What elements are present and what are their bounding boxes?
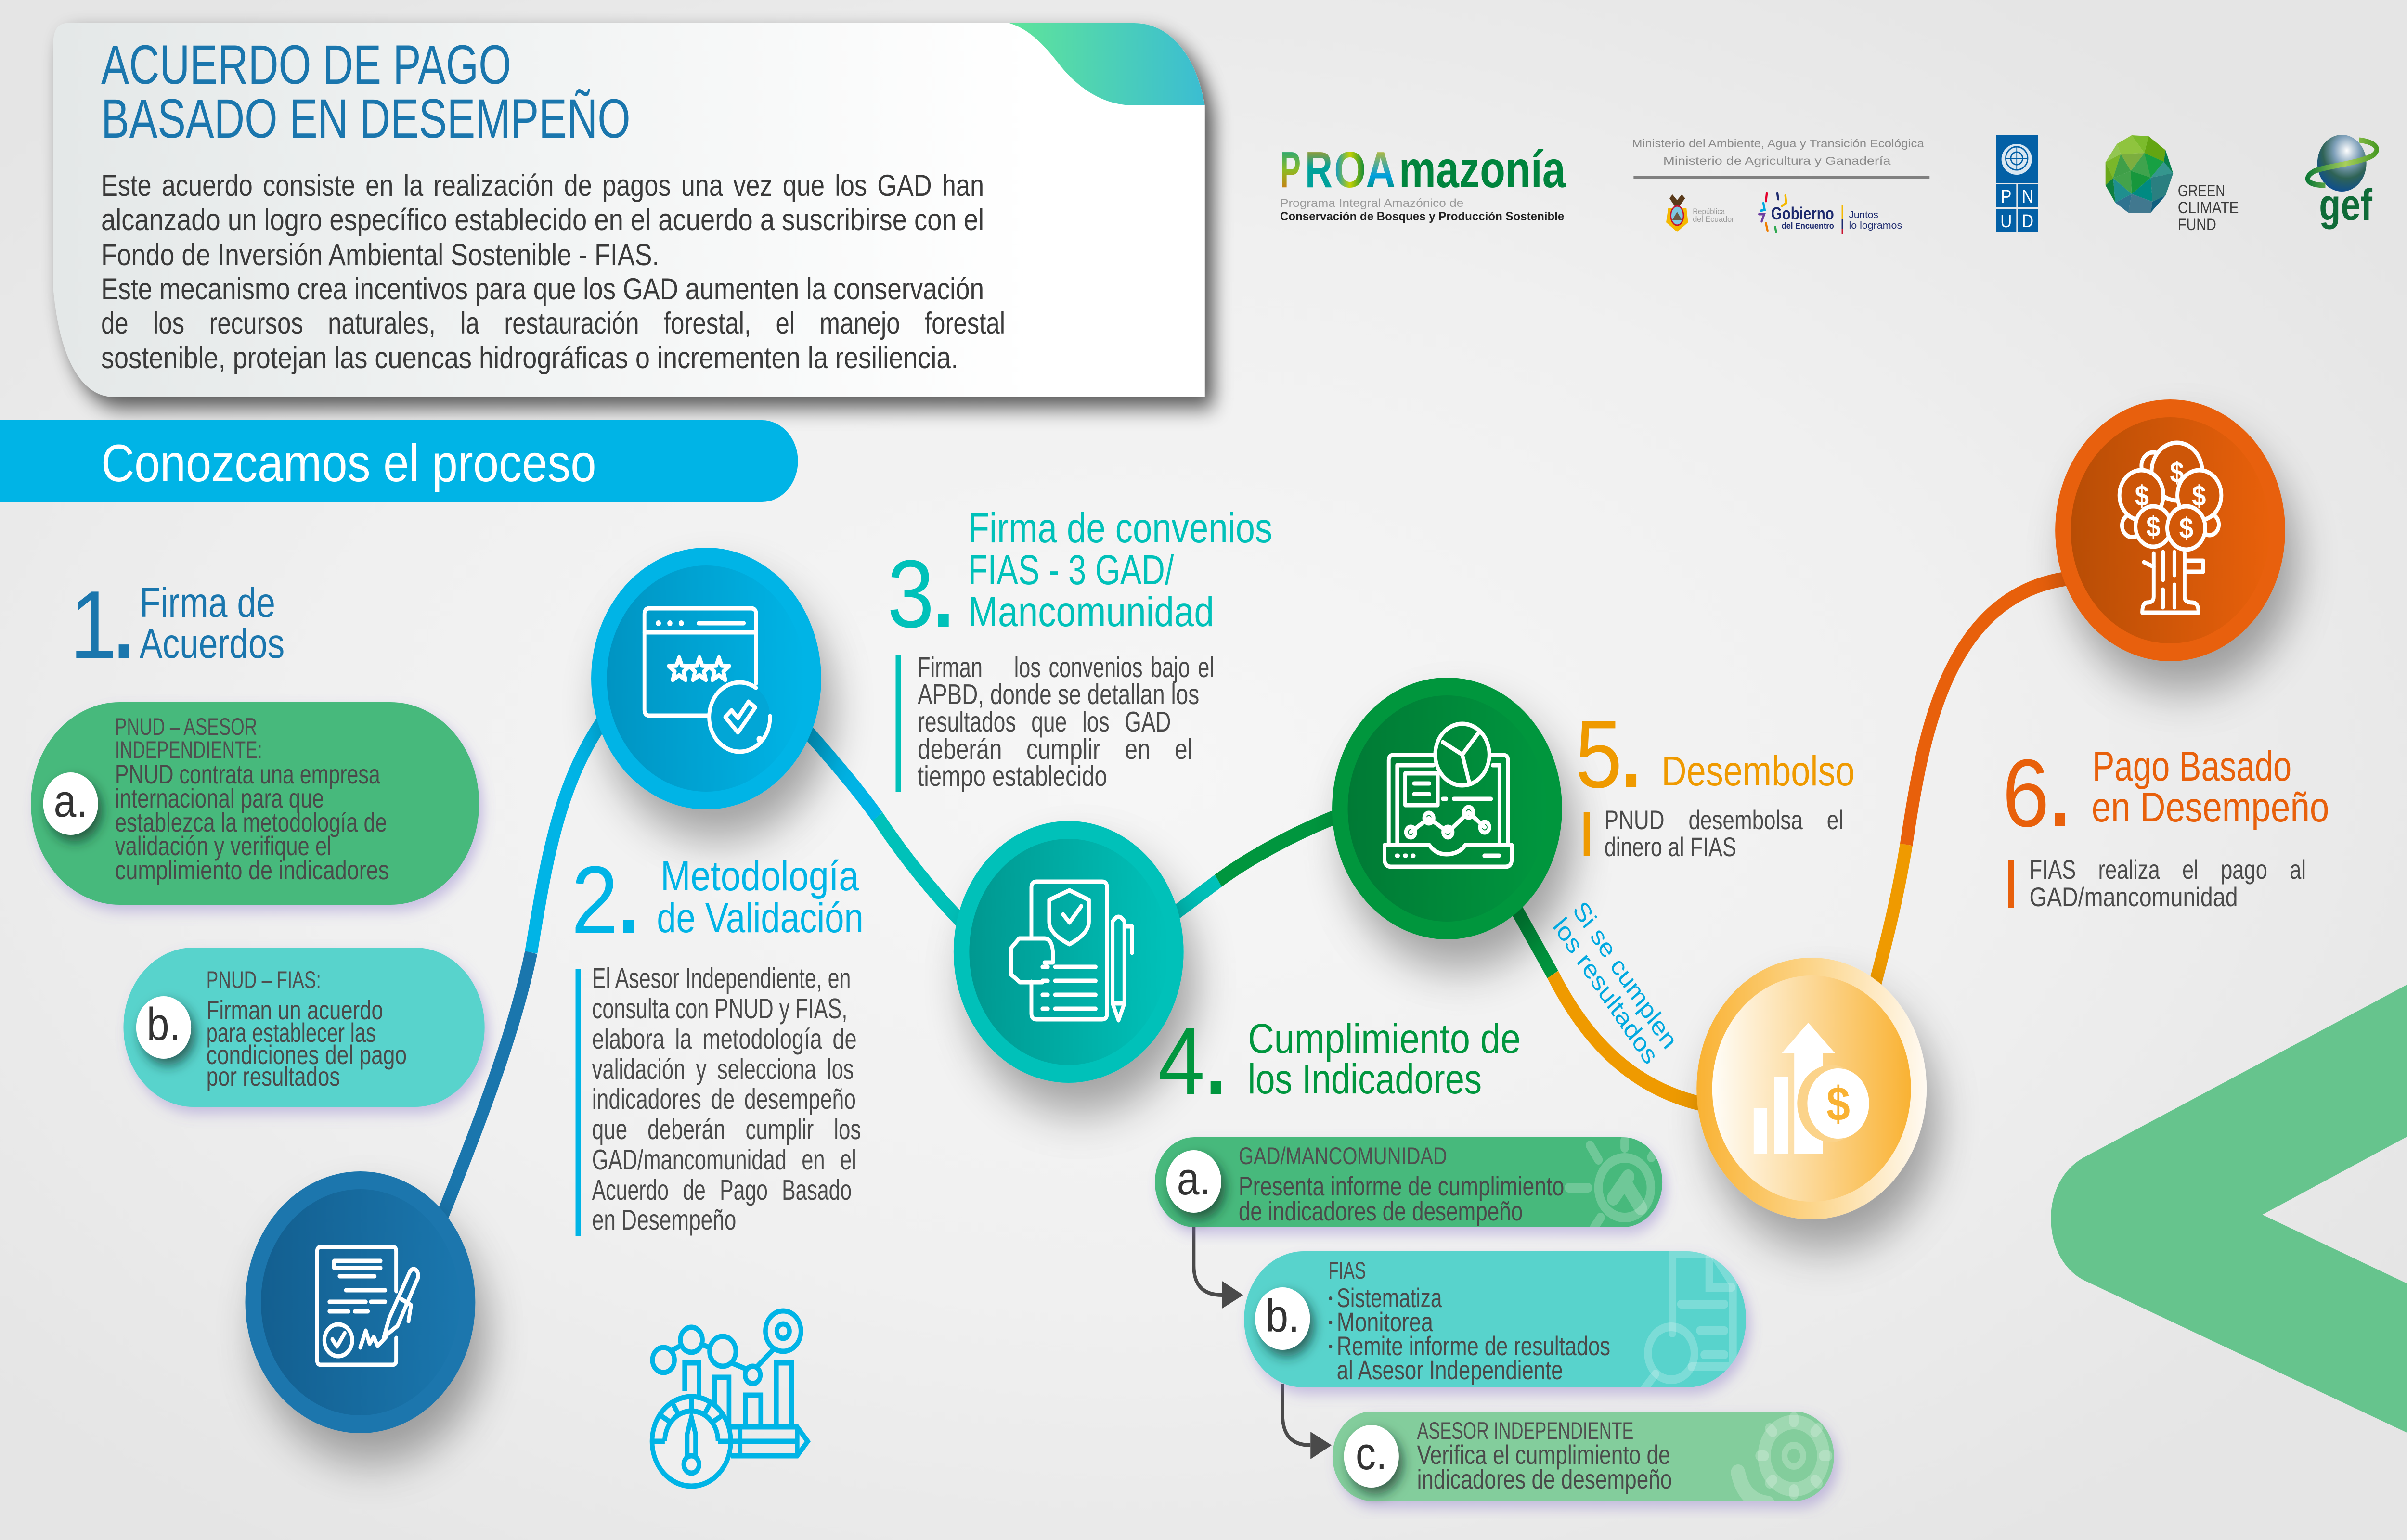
step 2 heading bbox=[571, 820, 864, 960]
step 5 text block: PNUD desembolsa el bbox=[1605, 805, 1843, 835]
step 4 card b: al Asesor Independiente bbox=[1337, 1355, 1563, 1386]
step 4 card b: • bbox=[1328, 1314, 1333, 1330]
logo: PROAmazonía: O bbox=[1334, 141, 1366, 198]
logo: PROAmazonía: R bbox=[1305, 141, 1333, 198]
logo: PROAmazonía bbox=[1280, 140, 1566, 223]
connector arrow b to c bbox=[1282, 1384, 1332, 1459]
step 1 card a: PNUD – ASESOR bbox=[115, 713, 257, 740]
step 3 text block: APBD, donde se detallan los bbox=[918, 679, 1199, 710]
step 1 card a bbox=[31, 702, 479, 905]
icon: watermark gear and hand bbox=[1569, 1141, 1656, 1227]
step 2 heading: . bbox=[613, 820, 644, 960]
step 1: Firma de Acuerdos heading: Firma de bbox=[140, 579, 275, 626]
logo: ministries and Gobierno del Encuentro: República bbox=[1693, 207, 1725, 216]
icon: laptop with charts bbox=[1385, 724, 1512, 867]
step 6 heading: 6 bbox=[2002, 739, 2049, 847]
step 4 card a: a. bbox=[1177, 1153, 1211, 1205]
step 6 heading: en Desempeño bbox=[2092, 784, 2329, 831]
step 1 card b: para establecer las bbox=[207, 1018, 376, 1048]
logo: PNUD: N bbox=[2022, 186, 2033, 206]
step 1 card b: PNUD – FIAS: bbox=[207, 966, 321, 993]
connector arrow a to b bbox=[1194, 1227, 1243, 1309]
logo: PROAmazonía: A bbox=[1366, 141, 1396, 198]
logo: Green Climate Fund: FUND bbox=[2178, 215, 2216, 233]
step 1: Firma de Acuerdos heading: Acuerdos bbox=[140, 620, 285, 667]
step 6 circle with money tree icon bbox=[2055, 399, 2285, 661]
step 4 heading: 4 bbox=[1158, 1007, 1205, 1115]
step 4 card a: Presenta informe de cumplimiento bbox=[1239, 1171, 1564, 1202]
section banner bbox=[0, 420, 798, 502]
step 6 text block: FIAS realiza el pago al bbox=[2030, 855, 2306, 885]
logo: ministries and Gobierno del Encuentro: del Ecuador bbox=[1693, 215, 1734, 224]
step 2 heading: de Validación bbox=[657, 895, 864, 941]
step 1: Firma de Acuerdos heading: 1 bbox=[70, 571, 117, 679]
step 6 heading: Pago Basado bbox=[2092, 743, 2291, 790]
logo: PNUD bbox=[1996, 135, 2038, 232]
title: BASADO EN DESEMPEÑO bbox=[101, 88, 631, 149]
title: ACUERDO DE PAGO bbox=[101, 34, 511, 95]
panel: introduction bbox=[53, 23, 1205, 397]
step 5 text block: dinero al FIAS bbox=[1605, 832, 1736, 862]
icon: window with stars and check bbox=[645, 608, 770, 752]
step 1 card b: por resultados bbox=[207, 1062, 340, 1092]
step 1 card b: Firman un acuerdo bbox=[207, 995, 383, 1026]
step 1 card a: a. bbox=[54, 775, 88, 827]
intro text: alcanzado un logro específico establecido en el acuerdo a suscribirse con el bbox=[101, 203, 984, 237]
step 2 text block: que deberán cumplir los bbox=[592, 1114, 861, 1145]
step 4 circle with laptop analytics icon bbox=[1332, 678, 1562, 939]
step 4 card b: • bbox=[1328, 1290, 1333, 1306]
step 4 card b: FIAS bbox=[1328, 1257, 1366, 1284]
logo: PNUD: D bbox=[2022, 211, 2033, 231]
step 4 card a bbox=[1155, 1137, 1662, 1227]
step 4 card a: de indicadores de desempeño bbox=[1239, 1196, 1523, 1227]
step 6 text block: GAD/mancomunidad bbox=[2030, 882, 2238, 912]
icon: contract with shield and pen bbox=[1011, 882, 1132, 1020]
step 4 card c bbox=[1333, 1412, 1834, 1504]
step 3 text block: deberán cumplir en el bbox=[918, 733, 1192, 765]
step 5 circle with growth icon bbox=[1696, 958, 1927, 1219]
intro text: Este acuerdo consiste en la realización de pagos una vez que los GAD han bbox=[101, 168, 984, 203]
logo: Green Climate Fund: CLIMATE bbox=[2178, 198, 2239, 217]
step 6 text block bbox=[2008, 855, 2306, 912]
step 5 text block bbox=[1584, 805, 1843, 862]
logo: PNUD: P bbox=[2001, 186, 2011, 206]
process path connecting steps bbox=[440, 578, 2072, 1222]
icon: money tree: $ bbox=[2135, 480, 2149, 512]
step 1 circle with document icon bbox=[245, 1171, 475, 1433]
step 2 text block: Acuerdo de Pago Basado bbox=[592, 1174, 852, 1206]
logo: ministries and Gobierno del Encuentro: del Encuentro bbox=[1782, 221, 1834, 231]
step 4 card b: Monitorea bbox=[1337, 1307, 1434, 1337]
step 1 card b: condiciones del pago bbox=[207, 1040, 407, 1070]
icon: watermark document and magnifier bbox=[1641, 1253, 1733, 1393]
logo: ministries and Gobierno del Encuentro: Ministerio del Ambiente, Agua y Transición Ecológica bbox=[1632, 137, 1925, 150]
logo: gef: gef bbox=[2319, 180, 2372, 230]
step 2 text block bbox=[576, 962, 861, 1236]
logo: ministries and Gobierno del Encuentro bbox=[1632, 137, 1929, 234]
step 2 text block: elabora la metodología de bbox=[592, 1023, 857, 1055]
logo: PROAmazonía: Programa Integral Amazónico de bbox=[1280, 197, 1463, 209]
step 5 heading: . bbox=[1616, 674, 1646, 814]
step 1: Firma de Acuerdos heading: . bbox=[109, 544, 139, 684]
logo: gef bbox=[2308, 135, 2377, 230]
step 5 heading: 5 bbox=[1575, 700, 1622, 808]
path label: Si se cumplen los resultados: Si se cumplen bbox=[1568, 896, 1682, 1054]
step 4 heading bbox=[1158, 981, 1521, 1121]
intro text: Fondo de Inversión Ambiental Sostenible - FIAS. bbox=[101, 238, 659, 272]
logo: ministries and Gobierno del Encuentro: Gobierno bbox=[1771, 204, 1834, 223]
step 4 card a: GAD/MANCOMUNIDAD bbox=[1239, 1142, 1447, 1169]
step 2 text block: en Desempeño bbox=[592, 1204, 736, 1236]
step 2 heading: 2 bbox=[571, 846, 618, 954]
step 1 card a: validación y verifique el bbox=[115, 831, 332, 861]
intro text: sostenible, protejan las cuencas hidrográficas o incrementen la resiliencia. bbox=[101, 341, 958, 375]
logo: PROAmazonía: mazonía bbox=[1399, 140, 1566, 198]
step 1 card a: INDEPENDIENTE: bbox=[115, 736, 262, 763]
step 2 text block: validación y selecciona los bbox=[592, 1053, 854, 1085]
icon: money tree bbox=[2120, 443, 2221, 613]
icon: watermark gear bbox=[1738, 1417, 1828, 1504]
step 6 heading bbox=[2002, 713, 2329, 853]
logo: ministries and Gobierno del Encuentro: lo logramos bbox=[1849, 220, 1902, 231]
step 4 card b bbox=[1244, 1251, 1746, 1393]
icon: money tree: $ bbox=[2192, 480, 2206, 512]
path label: Si se cumplen los resultados: los resultados bbox=[1548, 912, 1663, 1069]
intro text bbox=[101, 168, 1005, 375]
step 6 heading: . bbox=[2045, 713, 2075, 853]
step 1 card b: b. bbox=[147, 999, 181, 1050]
step 4 card b: Sistematiza bbox=[1337, 1283, 1442, 1313]
step 2 circle with rating window icon bbox=[591, 548, 821, 809]
step 4 heading: . bbox=[1201, 981, 1231, 1121]
logo: ministries and Gobierno del Encuentro: Juntos bbox=[1849, 209, 1878, 220]
step 2 text block: El Asesor Independiente, en bbox=[592, 962, 851, 994]
section banner: Conozcamos el proceso bbox=[101, 433, 596, 492]
decorative green chevron bbox=[2051, 985, 2407, 1433]
step 3 heading: Mancomunidad bbox=[968, 589, 1214, 635]
step 1: Firma de Acuerdos heading bbox=[70, 544, 285, 684]
step 1 card a: cumplimiento de indicadores bbox=[115, 855, 389, 886]
step 1 card b bbox=[124, 948, 485, 1107]
step 3 circle with contract icon bbox=[954, 821, 1184, 1083]
path label: Si se cumplen los resultados bbox=[1548, 896, 1682, 1069]
step 1 card a: establezca la metodología de bbox=[115, 808, 387, 838]
step 4 card b: • bbox=[1328, 1338, 1333, 1354]
step 4 card c: indicadores de desempeño bbox=[1417, 1464, 1672, 1495]
step 3 text block: Firman los convenios bajo el bbox=[918, 652, 1214, 683]
logo: ministries and Gobierno del Encuentro: Ministerio de Agricultura y Ganadería bbox=[1663, 154, 1891, 167]
intro text: Este mecanismo crea incentivos para que los GAD aumenten la conservación bbox=[101, 272, 984, 306]
intro text: de los recursos naturales, la restauración forestal, el manejo forestal bbox=[101, 306, 1005, 340]
step 5 heading bbox=[1575, 674, 1855, 814]
step 4 card c: Verifica el cumplimiento de bbox=[1417, 1440, 1670, 1470]
step 5 heading: Desembolso bbox=[1661, 748, 1855, 795]
logo: Green Climate Fund: GREEN bbox=[2178, 181, 2225, 200]
icon: money tree: $ bbox=[2146, 511, 2161, 543]
logo: PROAmazonía: P bbox=[1280, 141, 1301, 198]
step 2 text block: indicadores de desempeño bbox=[592, 1083, 856, 1115]
step 4 card c: c. bbox=[1356, 1428, 1387, 1479]
step 2 text block: consulta con PNUD y FIAS, bbox=[592, 993, 847, 1025]
step 3 heading bbox=[887, 505, 1272, 654]
icon: indicators chart with gauge and pencil bbox=[652, 1311, 808, 1486]
logo: Green Climate Fund bbox=[2106, 135, 2239, 233]
icon: money tree: $ bbox=[2179, 512, 2193, 544]
step 3 heading: FIAS - 3 GAD/ bbox=[968, 547, 1174, 593]
step 3 text block: tiempo establecido bbox=[918, 760, 1107, 792]
step 4 heading: los Indicadores bbox=[1248, 1056, 1482, 1103]
icon: signed document bbox=[317, 1247, 418, 1365]
step 4 heading: Cumplimiento de bbox=[1248, 1015, 1521, 1062]
step 3 heading: 3 bbox=[887, 540, 934, 647]
step 3 heading: . bbox=[928, 513, 959, 654]
step 2 heading: Metodología bbox=[660, 853, 859, 899]
step 3 text block bbox=[896, 652, 1214, 792]
logo: PNUD: U bbox=[2000, 211, 2012, 231]
icon: growth arrow with coin: $ bbox=[1826, 1077, 1850, 1130]
icon: money tree: $ bbox=[2170, 456, 2184, 488]
step 4 card b: Remite informe de resultados bbox=[1337, 1331, 1610, 1361]
step 4 card b: b. bbox=[1266, 1290, 1299, 1342]
step 1 card a: internacional para que bbox=[115, 783, 324, 814]
step 4 card c: ASESOR INDEPENDIENTE bbox=[1417, 1417, 1633, 1444]
logo: PROAmazonía: Conservación de Bosques y Producción Sostenible bbox=[1280, 210, 1564, 223]
step 2 text block: GAD/mancomunidad en el bbox=[592, 1144, 856, 1176]
step 3 heading: Firma de convenios bbox=[968, 505, 1272, 552]
step 3 text block: resultados que los GAD bbox=[918, 706, 1171, 738]
icon: growth arrow with coin bbox=[1754, 1023, 1869, 1154]
step 1 card a: PNUD contrata una empresa bbox=[115, 759, 380, 790]
title bbox=[101, 34, 631, 149]
